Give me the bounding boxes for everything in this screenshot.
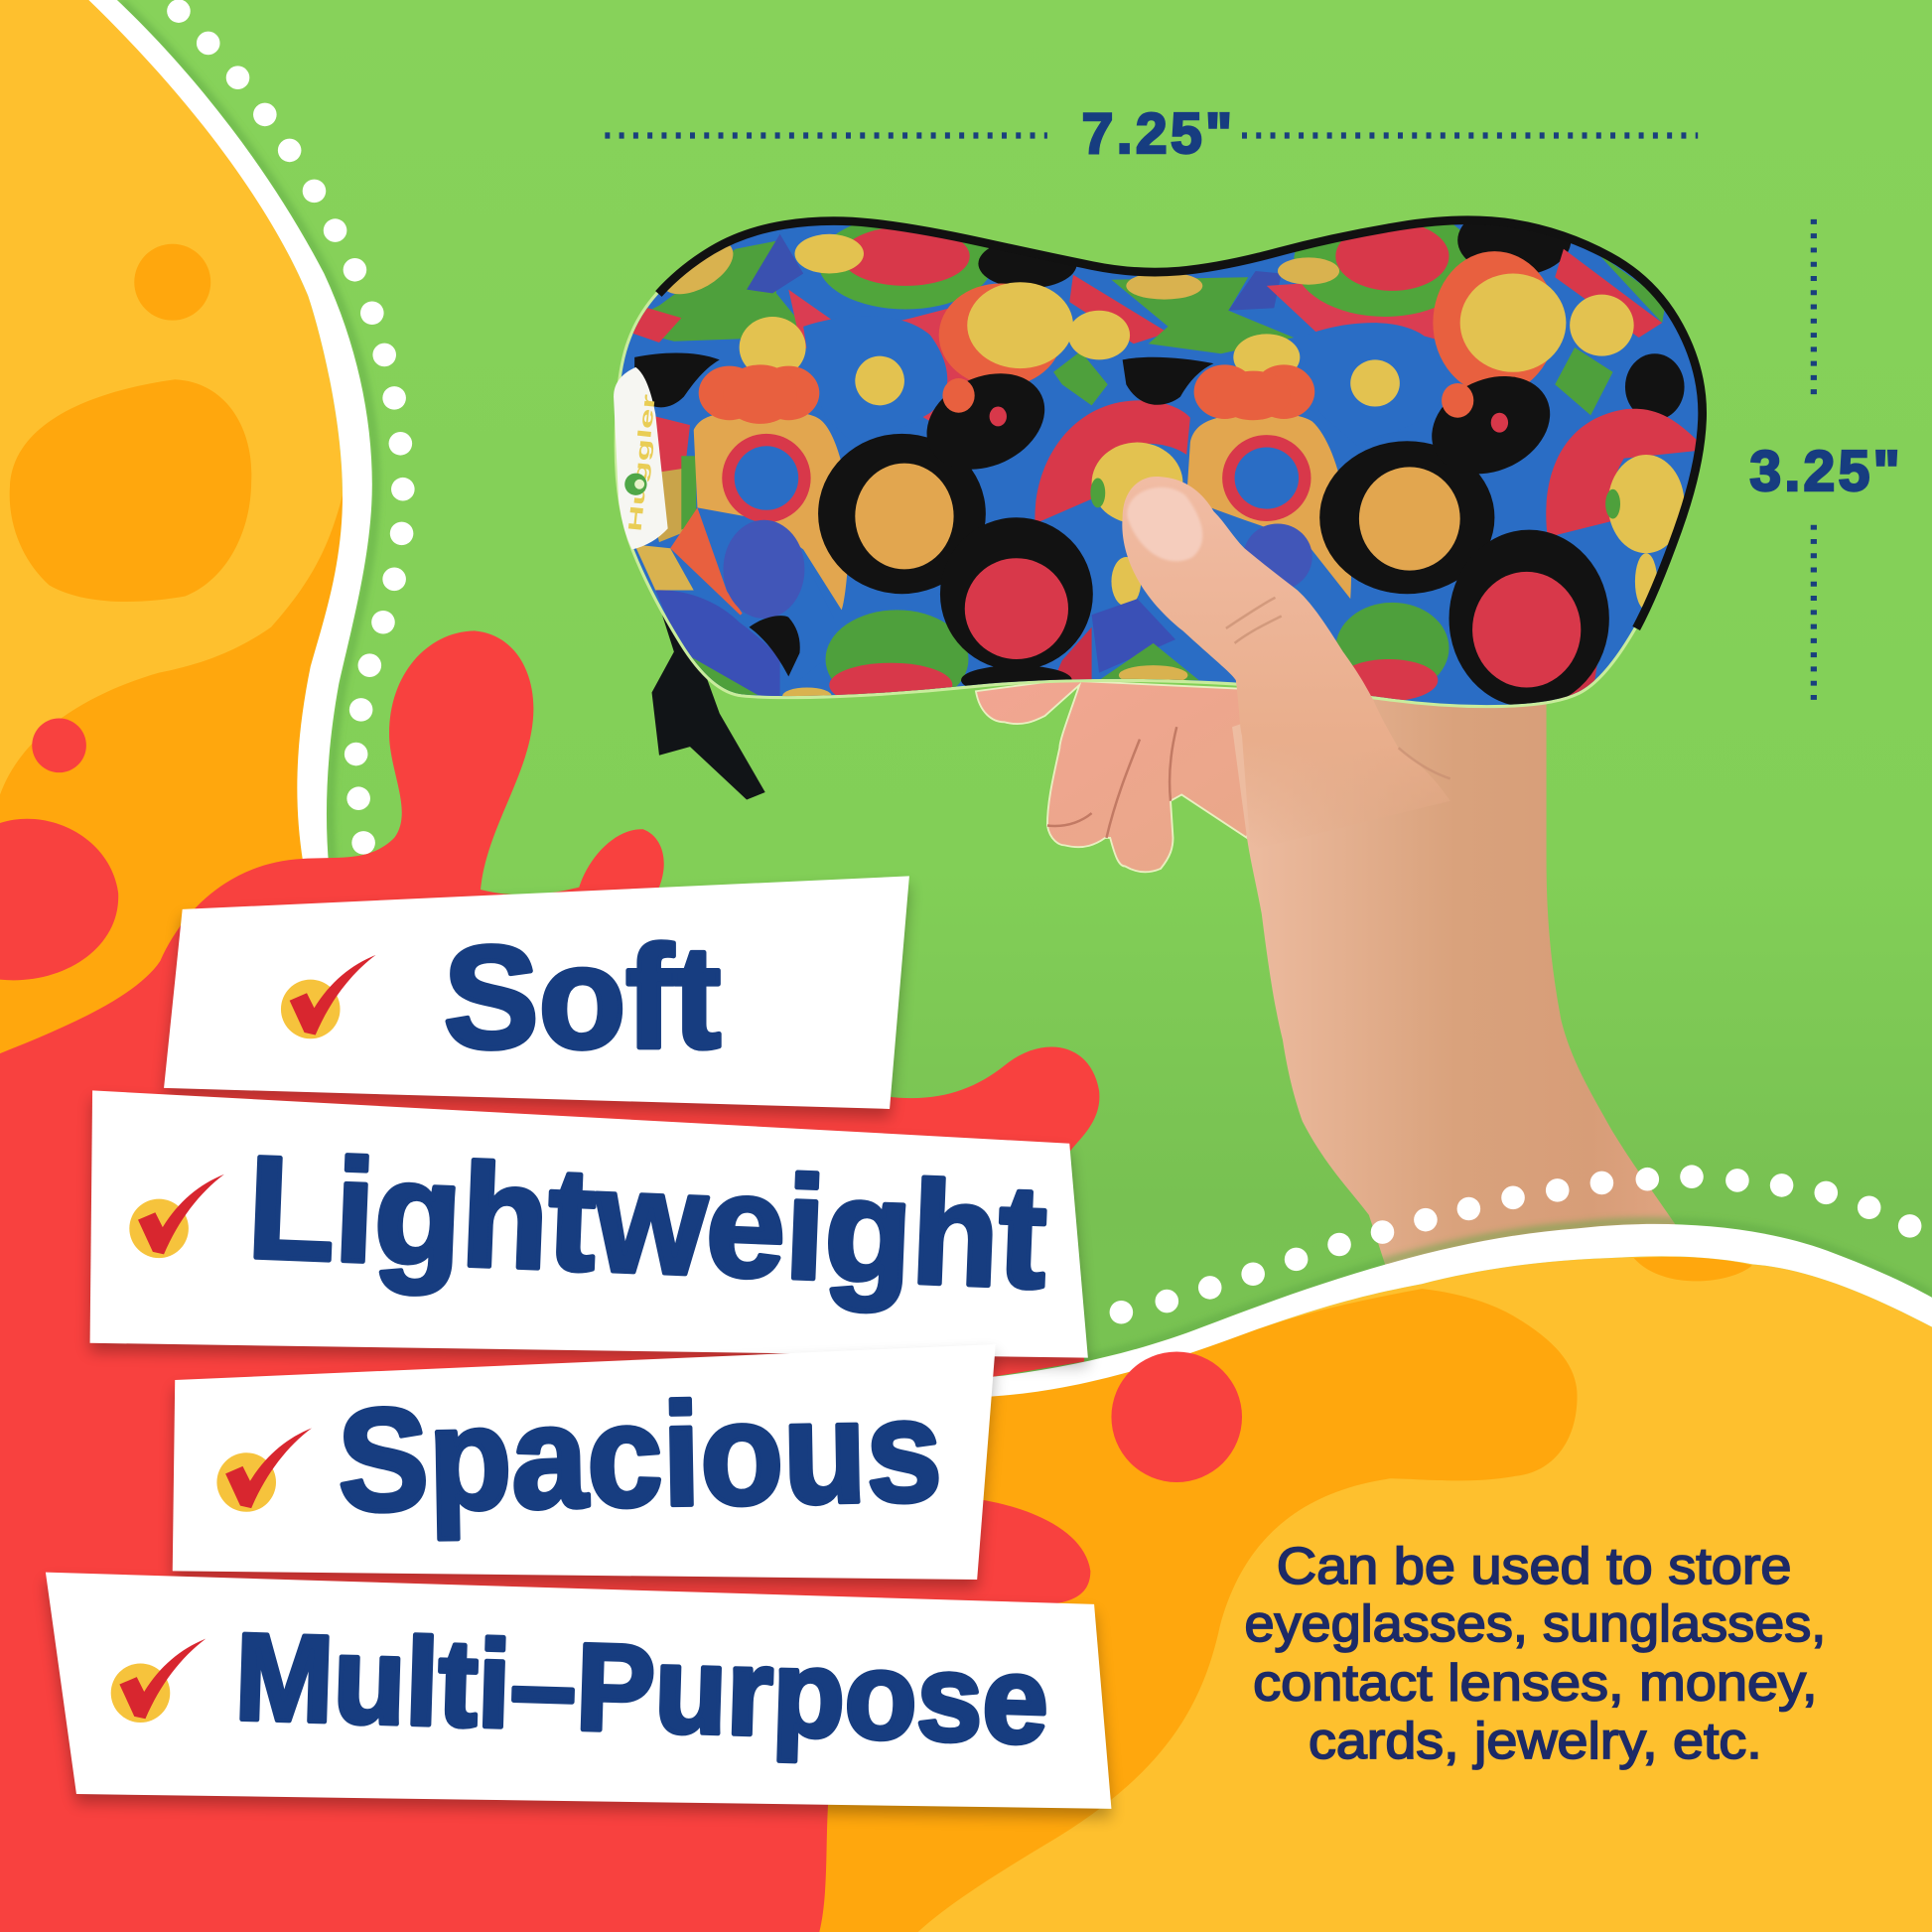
- icon: check: [129, 1174, 224, 1258]
- label: Spacious: [337, 1369, 943, 1543]
- red splat: [0, 630, 1099, 1932]
- tag logo: [624, 474, 647, 495]
- width label: 7.25": [1082, 102, 1232, 166]
- small orange blob: [1634, 1257, 1752, 1281]
- orange lower area: [0, 495, 343, 1059]
- description text: [1244, 1538, 1826, 1770]
- left pattern repeat: [633, 240, 796, 342]
- white band: [967, 1224, 1932, 1399]
- tag text: Huggler: [623, 393, 659, 533]
- label: Lightweight: [245, 1126, 1049, 1319]
- red blob lower splat: [936, 1497, 1090, 1605]
- description text: cards, jewelry, etc.: [1309, 1713, 1762, 1770]
- height label: 3.25": [1749, 440, 1900, 503]
- white band: [88, 0, 372, 869]
- orange blob: [10, 379, 251, 602]
- left red blob: [0, 819, 118, 980]
- label: Soft: [444, 916, 721, 1079]
- right pattern repeat: [1267, 284, 1436, 340]
- band shadow: [997, 1221, 1932, 1374]
- zipper pull: [652, 594, 765, 799]
- bottom-right yellow wave panel: [813, 1221, 1932, 1932]
- glasses case: [604, 205, 1713, 715]
- hand and forearm: [976, 680, 1681, 1276]
- finger crease: [1047, 727, 1176, 838]
- icon: check: [216, 1428, 312, 1512]
- icon: check: [281, 955, 376, 1038]
- banner: Soft: [164, 876, 909, 1118]
- banner: Lightweight: [90, 1090, 1088, 1366]
- orange blob: [813, 1289, 1578, 1932]
- orange dot: [134, 244, 210, 321]
- icon: check: [111, 1639, 206, 1723]
- small red dot: [32, 719, 86, 772]
- banner: Spacious: [173, 1344, 996, 1588]
- thumb: [1122, 477, 1450, 850]
- forearm: [1232, 684, 1681, 1276]
- description text: Can be used to store: [1277, 1538, 1792, 1595]
- dotted trail left: [167, 0, 415, 855]
- banner: Multi-Purpose: [46, 1573, 1111, 1818]
- description text: eyeglasses, sunglasses,: [1244, 1595, 1826, 1653]
- description text: contact lenses, money,: [1253, 1655, 1818, 1713]
- brand tag: [614, 367, 668, 550]
- case zipper rim: [658, 220, 1703, 628]
- knuckle creases: [1226, 598, 1450, 778]
- fingers: [976, 680, 1269, 872]
- band shadow: [121, 1, 376, 870]
- bottom dotted trail: [1110, 1165, 1921, 1324]
- label: Multi–Purpose: [233, 1608, 1050, 1770]
- top-left yellow wave panel: [0, 0, 376, 1059]
- thumb nail: [1127, 487, 1202, 561]
- red dot: [1111, 1351, 1242, 1482]
